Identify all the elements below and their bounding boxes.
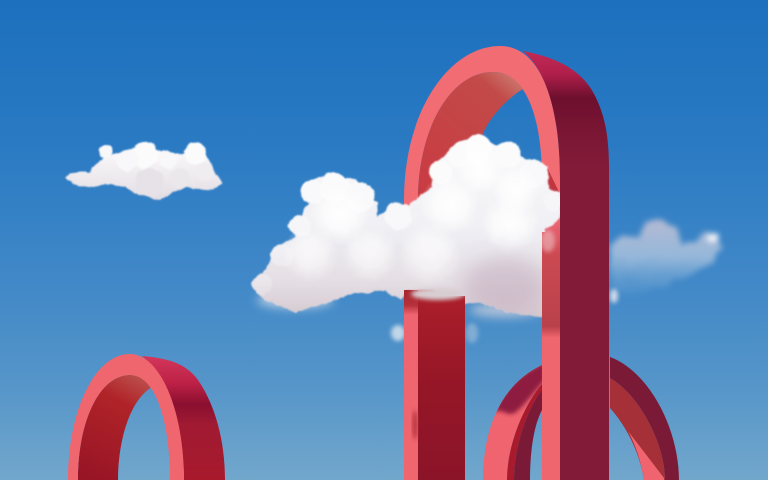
small rear arch: left outer side: [483, 365, 542, 480]
cloud underside over left pillar: [411, 288, 465, 300]
small rear arch: right inner surface: [610, 378, 665, 480]
large arch: right pillar side: [560, 170, 609, 480]
cloud: soft lower edge: [257, 292, 541, 317]
cloud tint on right pillar: [541, 230, 555, 252]
small rear arch: shadow on side: [496, 365, 542, 416]
small left arch: inner surface: [78, 375, 152, 480]
large arch: front face: [404, 46, 560, 300]
cloud: hazy far right: [610, 218, 722, 295]
cloud: small upper left: [65, 142, 223, 200]
cloud: small wisps below main cloud: [391, 289, 618, 343]
large arch: right pillar front face: [542, 190, 560, 480]
large arch: shadow notch behind cloud: [546, 165, 559, 196]
large arch: shadow on left pillar: [412, 410, 418, 440]
cloud: main large: [240, 135, 570, 325]
large arch: left pillar front face: [404, 290, 418, 480]
large arch: left pillar inner surface: [418, 296, 465, 480]
large arch: inner surface: [418, 72, 523, 300]
small left arch: outer side: [142, 356, 225, 480]
small left arch: front face: [68, 354, 184, 480]
large arch: outer side: [523, 51, 609, 480]
small rear arch: inner edge strip: [507, 384, 542, 480]
small rear arch: lit patch on inner surface: [628, 431, 664, 480]
small rear arch: right front face: [610, 357, 679, 480]
small rear arch: left front face: [514, 390, 542, 480]
